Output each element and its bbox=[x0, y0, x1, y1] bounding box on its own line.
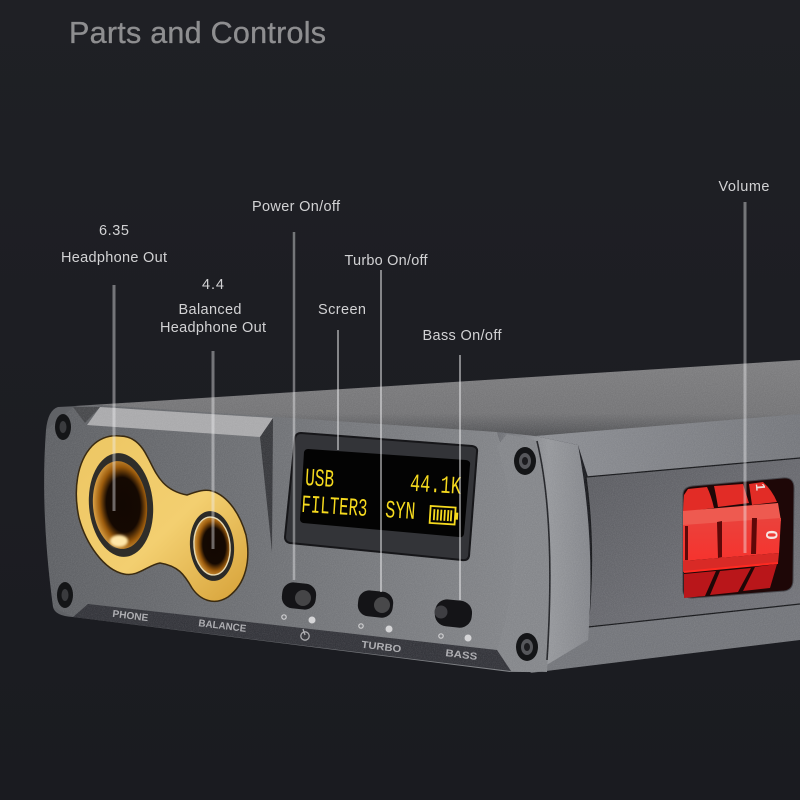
panel edge lines bbox=[586, 458, 800, 627]
top chamfer dark right bbox=[260, 418, 273, 552]
corner column bbox=[497, 432, 590, 672]
label: balance: BALANCE bbox=[198, 618, 247, 635]
label: bass on/off: Bass On/off bbox=[422, 328, 502, 344]
label: 4.4: 4.4 bbox=[202, 277, 224, 293]
jack ring bbox=[187, 509, 237, 583]
jack ring bbox=[85, 450, 157, 560]
screw top right bbox=[514, 447, 536, 475]
leader: 6.35 headphone out bbox=[112, 285, 116, 511]
screw top left bbox=[55, 414, 71, 440]
screen text bbox=[301, 463, 462, 530]
leader: screen bbox=[337, 330, 339, 450]
engraved labels bbox=[112, 609, 478, 663]
right side recessed panel bbox=[586, 458, 800, 627]
label: headphone out: Headphone Out bbox=[61, 250, 167, 266]
leader: balanced headphone out bbox=[212, 351, 214, 549]
callout labels bbox=[61, 179, 770, 344]
label: power on/off: Power On/off bbox=[252, 199, 341, 215]
screen bbox=[285, 433, 477, 560]
wheel lower band bbox=[683, 553, 779, 572]
wheel top row bbox=[683, 482, 777, 512]
wheel digit 0: 0 bbox=[762, 530, 781, 540]
power switch bbox=[281, 581, 317, 624]
screen black area bbox=[300, 449, 470, 537]
device: amplifier body bbox=[44, 360, 800, 673]
screw bottom right bbox=[516, 633, 538, 661]
gold jack plate bbox=[76, 436, 248, 601]
4.4 jack bbox=[187, 509, 237, 583]
top surface bbox=[75, 360, 800, 436]
USB: USB bbox=[304, 464, 335, 495]
icon: power bbox=[301, 629, 309, 640]
label: 6.35: 6.35 bbox=[99, 223, 129, 239]
top chamfer dark left bbox=[73, 407, 100, 423]
surface grain bbox=[44, 360, 800, 673]
wheel slots bbox=[685, 518, 757, 560]
label: bass: BASS bbox=[445, 648, 478, 663]
icon: battery bbox=[430, 506, 459, 525]
corner seam bbox=[537, 441, 550, 660]
jack highlight bbox=[110, 535, 128, 547]
jack collar bbox=[192, 516, 232, 576]
44.1K: 44.1K bbox=[409, 470, 462, 502]
SYN: SYN bbox=[384, 496, 416, 527]
leader: power bbox=[293, 232, 295, 580]
front plate bbox=[44, 405, 521, 672]
leader: bass bbox=[459, 355, 461, 600]
label: volume: Volume bbox=[718, 179, 770, 195]
title: Parts and Controls bbox=[69, 16, 326, 50]
label: balanced: Balanced bbox=[178, 302, 242, 318]
FILTER3: FILTER3 bbox=[301, 491, 368, 524]
volume wheel bbox=[683, 478, 794, 598]
leader lines bbox=[114, 202, 745, 600]
wheel lower glow bbox=[684, 563, 778, 572]
label: phone: PHONE bbox=[112, 609, 149, 624]
wheel digit 1: 1 bbox=[753, 483, 768, 491]
right side lower band bbox=[530, 604, 800, 673]
screen bezel bbox=[285, 433, 477, 560]
screw bottom left bbox=[57, 582, 73, 608]
wheel bottom row bbox=[684, 564, 777, 598]
switches bbox=[281, 581, 473, 642]
right side upper band bbox=[535, 414, 800, 477]
label: balanced headphone out: Headphone Out bbox=[160, 320, 266, 336]
label: screen: Screen bbox=[318, 302, 366, 318]
wheel window bbox=[683, 478, 794, 598]
top chamfer light bbox=[87, 407, 273, 437]
6.35 jack bbox=[85, 450, 157, 560]
corner plate bbox=[497, 434, 550, 672]
turbo switch bbox=[357, 589, 394, 632]
jack bore bbox=[89, 459, 151, 551]
leader: volume bbox=[744, 202, 746, 553]
label: turbo: TURBO bbox=[361, 640, 402, 655]
wheel middle bbox=[683, 518, 781, 561]
screws bbox=[55, 414, 538, 661]
bass switch bbox=[434, 598, 473, 642]
bottom chamfer bbox=[73, 604, 511, 671]
gold outline bbox=[76, 436, 248, 601]
wheel light band bbox=[683, 503, 781, 529]
leader: turbo bbox=[380, 270, 382, 592]
label: turbo on/off: Turbo On/off bbox=[344, 253, 428, 269]
